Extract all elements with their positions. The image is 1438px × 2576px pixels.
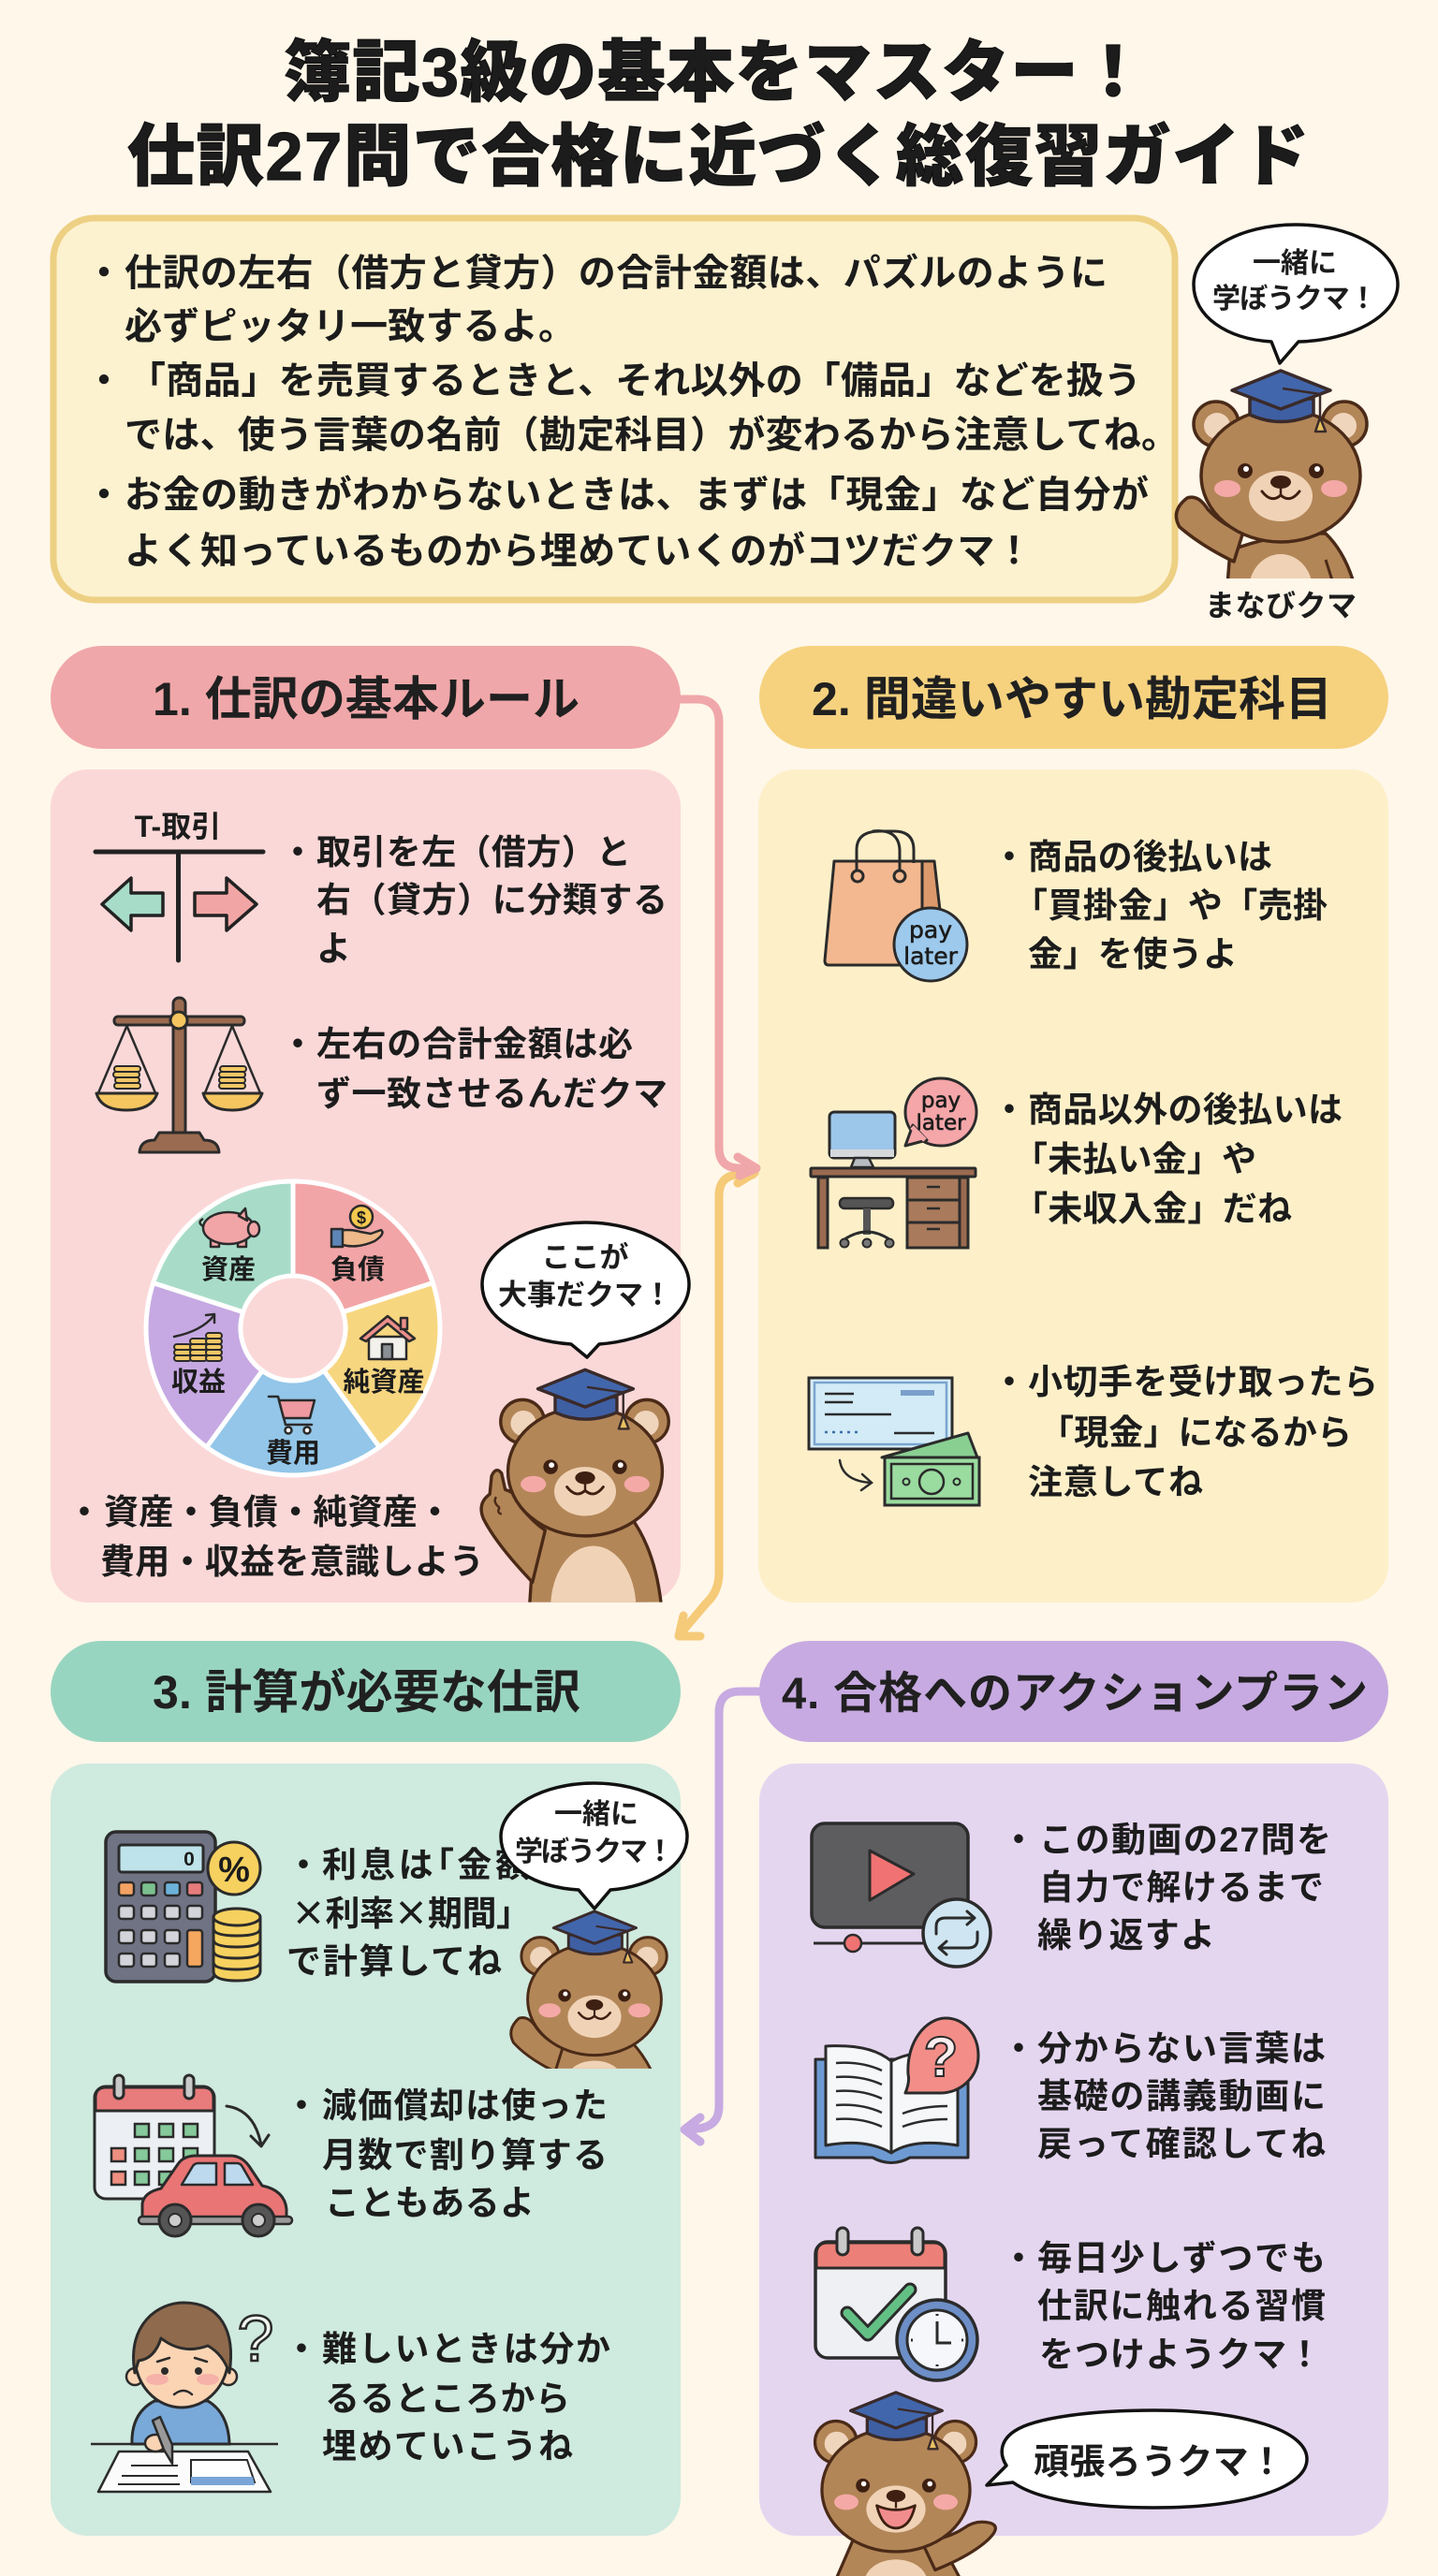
- text: interest explanation: で計算してね: [286, 1942, 502, 1981]
- text: interest explanation: ・: [286, 1846, 320, 1884]
- panel: intro summary: よく知っているものから埋めていくのがコツだクマ！: [125, 531, 1033, 572]
- text: cheque explanation: [992, 1363, 1378, 1501]
- text: repeat video: 自力で解けるまで: [1039, 1868, 1324, 1907]
- speech bubble: important: 大事だクマ！: [498, 1279, 672, 1311]
- text: check basics: 分からない言葉は: [1037, 2029, 1326, 2068]
- panel: intro summary: 仕訳の左右（借方と貸方）の合計金額は、パズルのように: [125, 253, 1108, 294]
- text: daily habit: 毎日少しずつでも: [1037, 2239, 1326, 2277]
- text: balance explanation: 左右の合計金額は必: [316, 1025, 633, 1063]
- text: payable explanation: 商品の後払いは: [1028, 838, 1272, 876]
- text: other payable explanation: ・: [992, 1090, 1026, 1129]
- icon: calendar and car: [95, 2075, 292, 2236]
- chart labels: 負債: [330, 1254, 385, 1285]
- text: payable explanation: 「買掛金」や「売掛: [1013, 886, 1328, 925]
- bear name label: まなびクマ: [1205, 589, 1357, 622]
- arrow: pink section 1 to section 2: [681, 699, 756, 1176]
- icon: hand with coin: $: [357, 1208, 366, 1227]
- text: repeat video: この動画の27問を: [1039, 1821, 1331, 1859]
- icon: house: [360, 1316, 415, 1359]
- speech bubble: do your best: [987, 2410, 1307, 2508]
- text: check basics: 基礎の講義動画に: [1037, 2077, 1326, 2115]
- text: payable explanation: 金」を使うよ: [1028, 935, 1238, 973]
- heading: section 2: [759, 646, 1388, 749]
- text: check basics: 戻って確認してね: [1037, 2125, 1326, 2163]
- text: daily habit: [1002, 2239, 1326, 2374]
- text: T account explanation: [281, 833, 668, 968]
- icon: piggy bank: [200, 1208, 259, 1247]
- icon: calendar with check and clock: [815, 2228, 977, 2380]
- text: T account explanation: 取引を左（借方）と: [316, 833, 631, 871]
- icon: desk pay later: [811, 1078, 976, 1248]
- heading: section 3: [51, 1641, 681, 1742]
- chart labels: 資産: [201, 1254, 256, 1285]
- text: balance explanation: ・: [281, 1025, 315, 1063]
- icon: balance scale: [96, 998, 262, 1152]
- panel: section 1 rules: [51, 646, 681, 1603]
- text: five categories note: ・: [67, 1493, 101, 1531]
- text: interest explanation: 利息は「金額: [322, 1846, 530, 1884]
- text: difficulty advice: るるところから: [325, 2379, 570, 2418]
- icon: confused student: ?: [238, 2302, 273, 2375]
- panel: intro summary: では、使う言葉の名前（勘定科目）が変わるから注意してね。: [125, 415, 1179, 456]
- icon: open book with question: ?: [924, 2026, 958, 2088]
- text: interest explanation: [286, 1846, 531, 1981]
- icon: hand with coin: [331, 1206, 382, 1247]
- text: interest explanation: ×利率×期間」: [291, 1885, 531, 1936]
- panel: section 4 action plan: [759, 1641, 1388, 2536]
- text: cheque explanation: 小切手を受け取ったら: [1028, 1363, 1378, 1401]
- speech bubble: learn together: 学ぼうクマ！: [515, 1837, 674, 1867]
- icon: video replay: [812, 1823, 990, 1967]
- title: 仕訳27問で合格に近づく総復習ガイド: [127, 120, 1309, 195]
- text: depreciation explanation: 減価償却は使った: [322, 2086, 608, 2125]
- icon: shopping bag pay later: [825, 831, 967, 981]
- text: difficulty advice: 埋めていこうね: [322, 2427, 573, 2466]
- text: depreciation explanation: こともあるよ: [325, 2184, 535, 2222]
- character: waving bear: [509, 1910, 668, 2069]
- panel: intro summary: [53, 218, 1179, 600]
- icon: calculator with coins: %: [218, 1851, 250, 1890]
- character: pointing bear: [479, 1368, 670, 1603]
- chart labels: 純資産: [343, 1367, 425, 1398]
- text: other payable explanation: [992, 1090, 1343, 1228]
- heading: section 1: 1. 仕訳の基本ルール: [153, 673, 580, 725]
- speech bubble: learn together: 一緒に: [554, 1799, 638, 1830]
- speech bubble: important: ここが: [541, 1241, 629, 1274]
- heading: section 4: [759, 1641, 1388, 1742]
- character: top bear mascot: [1174, 369, 1369, 578]
- speech bubble: top bear: [1194, 225, 1398, 363]
- speech bubble: top bear: 一緒に: [1253, 248, 1337, 279]
- text: depreciation explanation: 月数で割り算する: [322, 2136, 608, 2174]
- text: T account explanation: 右（貸方）に分類する: [316, 881, 668, 919]
- icon: confused student: [91, 2302, 278, 2492]
- icon: desk pay later: later: [916, 1111, 966, 1135]
- panel: intro summary: ・: [85, 360, 123, 402]
- text: five categories note: 費用・収益を意識しよう: [100, 1543, 484, 1581]
- arrow: purple section 4 to section 3: [684, 1691, 760, 2142]
- text: daily habit: 仕訳に触れる習慣: [1037, 2287, 1326, 2325]
- text: payable explanation: [992, 838, 1328, 973]
- panel: section 3 calculations: [51, 1641, 681, 2536]
- heading: section 1: [51, 646, 681, 749]
- icon: shopping bag pay later: pay: [909, 916, 952, 944]
- icon: rising coins: [174, 1314, 222, 1361]
- text: five categories note: 資産・負債・純資産・: [104, 1493, 452, 1531]
- text: repeat video: 繰り返すよ: [1037, 1916, 1215, 1954]
- text: difficulty advice: ・: [285, 2330, 318, 2368]
- chart labels: 収益: [171, 1367, 226, 1398]
- title: 簿記3級の基本をマスター！: [284, 36, 1147, 110]
- panel: intro summary: 必ずピッタリ一致するよ。: [125, 306, 576, 347]
- text: depreciation explanation: ・: [285, 2086, 318, 2125]
- heading: section 4: 4. 合格へのアクションプラン: [782, 1668, 1368, 1718]
- icon: T account: T-取引: [135, 810, 221, 843]
- text: difficulty advice: 難しいときは分か: [322, 2330, 610, 2368]
- text: difficulty advice: [285, 2330, 610, 2466]
- text: daily habit: をつけようクマ！: [1039, 2335, 1322, 2374]
- speech bubble: top bear: 学ぼうクマ！: [1212, 284, 1377, 315]
- text: other payable explanation: 商品以外の後払いは: [1028, 1090, 1343, 1129]
- text: balance explanation: [281, 1025, 668, 1113]
- text: repeat video: [1002, 1821, 1331, 1954]
- icon: T account: [95, 810, 263, 960]
- panel: intro summary: ・: [85, 475, 123, 516]
- text: cheque explanation: ・: [992, 1363, 1026, 1401]
- text: other payable explanation: 「未払い金」や: [1013, 1140, 1256, 1178]
- character: cheering bear: [815, 2393, 995, 2576]
- icon: desk pay later: pay: [921, 1089, 961, 1113]
- text: daily habit: ・: [1002, 2239, 1035, 2277]
- heading: section 3: 3. 計算が必要な仕訳: [153, 1666, 580, 1719]
- icon: open book with question: [815, 2018, 978, 2162]
- panel: intro summary: ・: [85, 253, 123, 294]
- chart: five accounting categories ring: [146, 1181, 440, 1475]
- arrow: yellow section 2 to section 3: [679, 1173, 755, 1636]
- text: repeat video: ・: [1002, 1821, 1035, 1859]
- icon: calculator with coins: [106, 1832, 260, 1982]
- text: payable explanation: ・: [992, 838, 1026, 876]
- title: [127, 36, 1309, 195]
- panel: intro summary: お金の動きがわからないときは、まずは「現金」など自分が: [125, 475, 1149, 516]
- text: cheque explanation: 注意してね: [1028, 1463, 1203, 1501]
- text: other payable explanation: 「未収入金」だね: [1013, 1190, 1292, 1228]
- chart labels: [171, 1254, 425, 1469]
- heading: section 2: 2. 間違いやすい勘定科目: [812, 673, 1332, 725]
- panel: intro summary: 「商品」を売買するときと、それ以外の「備品」などを扱う: [128, 360, 1141, 402]
- text: five categories note: [67, 1493, 484, 1581]
- speech bubble: important: [482, 1222, 689, 1357]
- speech bubble: learn together: [501, 1783, 687, 1909]
- icon: shopping cart: [269, 1397, 315, 1434]
- text: cheque explanation: 「現金」になるから: [1039, 1413, 1352, 1452]
- text: check basics: [1002, 2029, 1326, 2163]
- panel: section 2 confusing accounts: [758, 646, 1388, 1603]
- chart labels: 費用: [266, 1438, 320, 1469]
- speech bubble: do your best: 頑張ろうクマ！: [1034, 2443, 1284, 2482]
- text: T account explanation: ・: [281, 833, 315, 871]
- text: check basics: ・: [1002, 2029, 1035, 2068]
- text: T account explanation: よ: [316, 929, 351, 968]
- text: balance explanation: ず一致させるんだクマ: [316, 1075, 668, 1113]
- icon: cheque and cash: [809, 1378, 979, 1505]
- icon: calculator with coins: 0: [183, 1849, 195, 1870]
- text: depreciation explanation: [285, 2086, 608, 2222]
- icon: shopping bag pay later: later: [903, 943, 959, 970]
